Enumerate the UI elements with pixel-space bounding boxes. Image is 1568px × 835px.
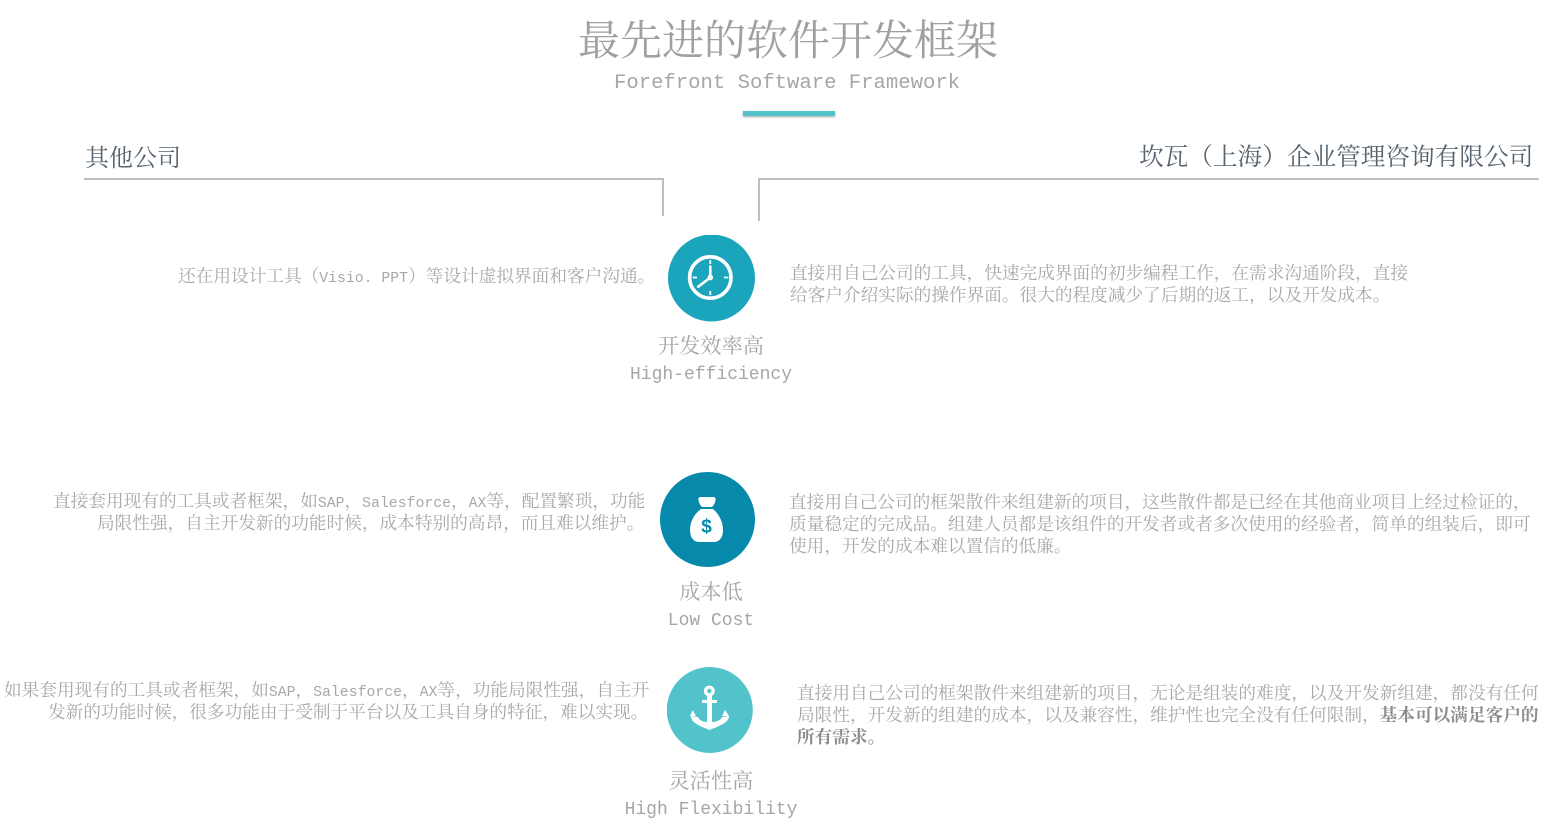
label: low cost: 成本低 xyxy=(679,576,743,606)
right bracket line xyxy=(758,178,1539,221)
title accent bar xyxy=(743,111,835,116)
row 3 left text: 发新的功能时候，很多功能由于受制于平台以及工具自身的特征，难以实现。 xyxy=(48,699,648,724)
row 3 right text: 所有需求。 xyxy=(797,724,885,749)
row 3 right text xyxy=(797,680,1539,749)
row 3 right text: 直接用自己公司的框架散件来组建新的项目，无论是组装的难度，以及开发新组建，都没有任何 xyxy=(797,680,1539,705)
row 1 right text xyxy=(790,260,1408,307)
row 3 left text: 如果套用现有的工具或者框架，如SAP，Salesforce，AX等，功能局限性强，自主开 xyxy=(4,677,649,702)
icon: clock xyxy=(668,235,755,322)
heading: other companies: 其他公司 xyxy=(85,138,181,173)
icon: anchor xyxy=(667,667,753,753)
row 2 right text xyxy=(789,489,1531,558)
label: high flexibility: 灵活性高 xyxy=(669,765,753,795)
row 2 right text: 直接用自己公司的框架散件来组建新的项目，这些散件都是已经在其他商业项目上经过检证的， xyxy=(789,489,1531,514)
row 3 left text xyxy=(4,677,649,724)
icon: money bag: $ xyxy=(701,516,712,538)
row 1 left text: 还在用设计工具（Visio. PPT）等设计虚拟界面和客户沟通。 xyxy=(178,263,655,288)
row 2 right text: 质量稳定的完成品。组建人员都是该组件的开发者或者多次使用的经验者，简单的组装后，即可 xyxy=(789,511,1531,536)
label: high flexibility xyxy=(625,765,797,820)
left bracket line xyxy=(84,178,664,216)
row 1 right text: 直接用自己公司的工具，快速完成界面的初步编程工作，在需求沟通阶段，直接 xyxy=(790,260,1408,285)
subtitle: Forefront Software Framework xyxy=(614,72,960,95)
row 1 right text: 给客户介绍实际的操作界面。很大的程度减少了后期的返工，以及开发成本。 xyxy=(790,282,1390,307)
row 3 right text: 局限性，开发新的组建的成本，以及兼容性，维护性也完全没有任何限制，基本可以满足客户的 xyxy=(797,702,1539,727)
heading: Kanwa Shanghai: 坎瓦（上海）企业管理咨询有限公司 xyxy=(1139,138,1533,173)
row 2 left text: 局限性强，自主开发新的功能时候，成本特别的高昂，而且难以维护。 xyxy=(97,510,644,535)
title: 最先进的软件开发框架 xyxy=(578,8,998,68)
icon: money bag xyxy=(660,472,755,567)
label: high efficiency: 开发效率高 xyxy=(658,330,764,360)
row 2 left text xyxy=(53,488,645,535)
label: low cost: Low Cost xyxy=(668,611,754,631)
row 2 right text: 使用，开发的成本难以置信的低廉。 xyxy=(789,533,1072,558)
label: low cost xyxy=(668,576,754,631)
label: high efficiency xyxy=(630,330,792,385)
label: high efficiency: High-efficiency xyxy=(630,365,792,385)
row 2 left text: 直接套用现有的工具或者框架，如SAP，Salesforce，AX等，配置繁琐，功能 xyxy=(53,488,645,513)
label: high flexibility: High Flexibility xyxy=(625,800,797,820)
